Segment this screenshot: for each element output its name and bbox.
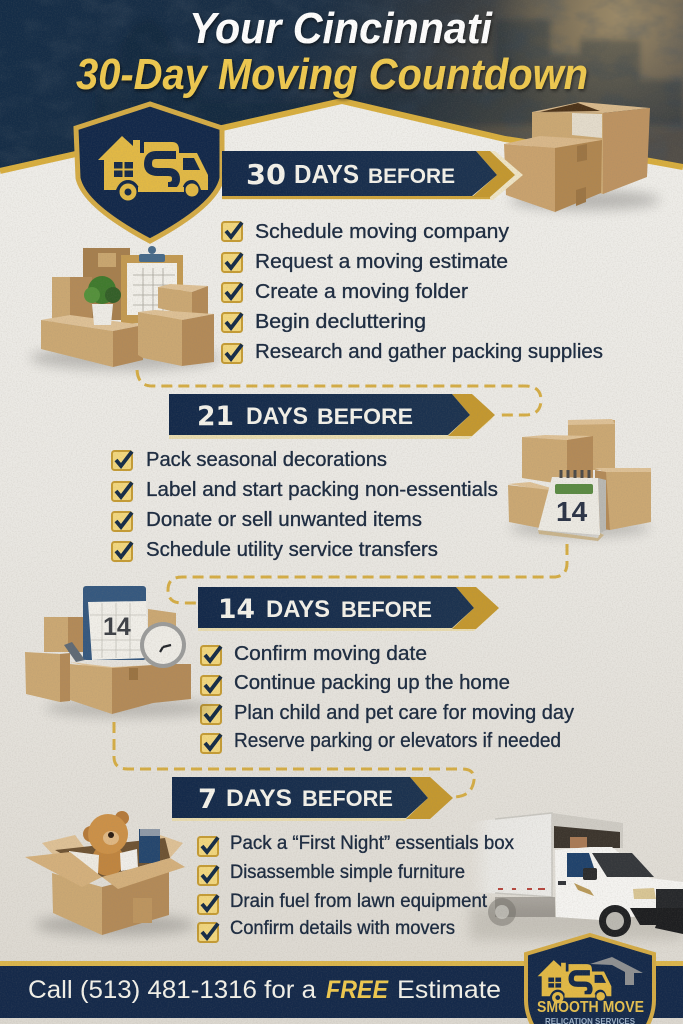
company name: SMOOTH MOVE	[537, 999, 644, 1016]
title: Your Cincinnati	[189, 4, 493, 53]
icon: wall calendar 14: 14	[103, 613, 131, 641]
item: Plan child and pet care for moving day	[234, 701, 575, 724]
dashed connector 21 to 14	[168, 544, 567, 603]
truck cab	[555, 847, 683, 937]
gold header line	[0, 101, 683, 171]
banner: 21 days before: 21	[197, 401, 234, 432]
banner: 30 days before: BEFORE	[368, 164, 455, 188]
item: Donate or sell unwanted items	[146, 508, 422, 531]
item: Research and gather packing supplies	[255, 340, 603, 363]
banner: 21 days before: DAYS	[246, 403, 308, 430]
banner: 7 days before: DAYS	[226, 785, 292, 812]
banner: 7 days before: 7	[198, 784, 217, 815]
item: Confirm moving date	[234, 642, 427, 665]
icon: potted plant	[84, 276, 121, 325]
illustration: open box with teddy bear	[25, 811, 195, 936]
illustration: boxes, plant and clipboard	[30, 246, 220, 370]
banner: 14 days before: BEFORE	[341, 597, 432, 622]
footer call to action: Estimate	[397, 976, 501, 1004]
item: Schedule moving company	[255, 220, 510, 243]
banner: 30 days before: 30	[246, 158, 286, 191]
logo shield	[76, 104, 222, 241]
item: Request a moving estimate	[255, 250, 508, 273]
banner: 21 days before: BEFORE	[317, 404, 413, 429]
illustration: two boxes top right	[504, 102, 660, 212]
banner: 14 days before	[198, 587, 499, 631]
checklist: 7 days	[198, 833, 514, 942]
illustration: moving truck	[470, 813, 683, 940]
checklist: 14 days	[201, 642, 575, 753]
item: Drain fuel from lawn equipment	[230, 891, 488, 912]
icon: wall calendar 14	[83, 586, 148, 660]
item: Label and start packing non-essentials	[146, 478, 498, 501]
banner: 14 days before: 14	[218, 594, 255, 625]
banner: 30 days before: DAYS	[294, 159, 359, 189]
title	[76, 4, 588, 99]
footer call to action	[28, 976, 501, 1004]
item: Pack seasonal decorations	[146, 448, 387, 471]
footer logo badge	[526, 935, 654, 1024]
banner: 14 days before: DAYS	[266, 596, 330, 623]
checklist: 30 days	[222, 220, 603, 363]
icon: teddy bear	[83, 811, 129, 876]
banner: 30 days before	[222, 151, 523, 200]
icon: house and truck	[98, 136, 208, 200]
banner: 7 days before	[172, 777, 453, 821]
item: Begin decluttering	[255, 310, 426, 333]
title: 30-Day Moving Countdown	[76, 50, 588, 99]
item: Disassemble simple furniture	[230, 862, 465, 883]
icon: flip calendar 14: 14	[556, 496, 588, 527]
item: Confirm details with movers	[230, 918, 455, 939]
item: Create a moving folder	[255, 280, 468, 303]
illustration: boxes, wall calendar and clock	[25, 586, 215, 717]
header: dark skyline band	[0, 0, 683, 175]
truck mark	[538, 960, 611, 1003]
footer call to action: FREE	[326, 976, 389, 1004]
banner: 7 days before: BEFORE	[302, 786, 393, 811]
icon: flip calendar 14	[538, 470, 606, 541]
item: Schedule utility service transfers	[146, 538, 438, 561]
banner: 21 days before	[169, 394, 495, 439]
dashed connector 14 to 7	[114, 722, 474, 797]
dashed connector 30 to 21	[137, 370, 541, 415]
item: Reserve parking or elevators if needed	[234, 729, 561, 752]
illustration: boxes and flip calendar	[508, 419, 651, 541]
footer band	[0, 961, 683, 1018]
gray house roof	[590, 957, 643, 985]
item: Pack a “First Night” essentials box	[230, 833, 514, 854]
footer call to action: Call (513) 481-1316 for a	[28, 976, 316, 1004]
icon: clock	[140, 622, 186, 668]
checklist: 21 days	[112, 448, 498, 561]
item: Continue packing up the home	[234, 671, 510, 694]
